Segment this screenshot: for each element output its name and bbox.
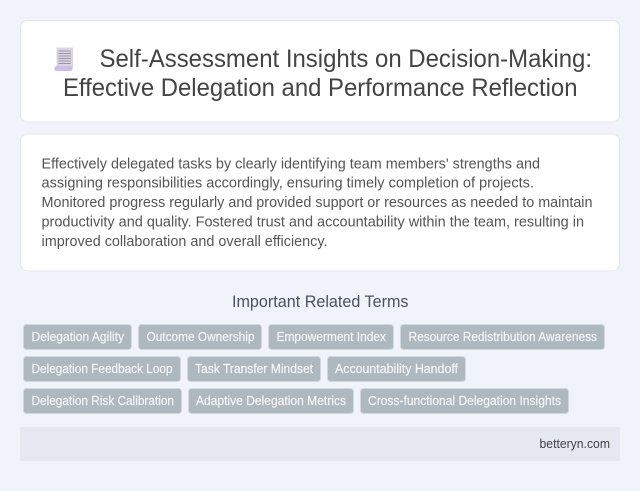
tag: Resource Redistribution Awareness — [400, 324, 604, 350]
footer source text: betteryn.com — [540, 436, 610, 451]
tag: Accountability Handoff — [328, 356, 466, 382]
tag: Task Transfer Mindset: Task Transfer Mindset — [195, 361, 313, 376]
tag: Accountability Handoff: Accountability Handoff — [335, 361, 458, 376]
tag: Delegation Feedback Loop: Delegation Feedback Loop — [32, 361, 172, 376]
panel: term tags — [24, 324, 604, 414]
summary line 5: improved collaboration and overall efficiency. — [42, 234, 328, 250]
heading: important related terms: Important Related Terms — [232, 293, 408, 311]
tag: Outcome Ownership: Outcome Ownership — [146, 329, 254, 344]
summary line 4: productivity and quality. Fostered trust and accountability within the team, resulting in — [42, 214, 584, 230]
summary line 2: assigning responsibilities accordingly, ensuring timely completion of projects. — [42, 176, 534, 192]
summary line 1: Effectively delegated tasks by clearly identifying team members' strengths and — [42, 156, 540, 172]
tag: Delegation Agility — [24, 324, 132, 350]
tag: Adaptive Delegation Metrics — [188, 388, 354, 414]
tag: Resource Redistribution Awareness: Resource Redistribution Awareness — [408, 329, 597, 344]
tag: Empowerment Index — [268, 324, 394, 350]
tag: Cross-functional Delegation Insights: Cross-functional Delegation Insights — [368, 393, 561, 408]
panel: summary text card — [20, 134, 620, 271]
tag: Outcome Ownership — [138, 324, 262, 350]
tag: Empowerment Index: Empowerment Index — [276, 329, 386, 344]
tag: Delegation Risk Calibration — [24, 388, 182, 414]
tag: Delegation Feedback Loop — [24, 356, 180, 382]
title line 1: Self-Assessment Insights on Decision-Making: — [100, 45, 592, 73]
footer bar — [20, 427, 620, 461]
tag: Delegation Risk Calibration: Delegation Risk Calibration — [32, 393, 174, 408]
tag: Adaptive Delegation Metrics: Adaptive Delegation Metrics — [196, 393, 346, 408]
panel: title card — [20, 20, 620, 122]
title line 2: Effective Delegation and Performance Reflection — [63, 74, 578, 102]
tag: Delegation Agility: Delegation Agility — [32, 329, 124, 344]
icon: document scroll — [54, 48, 73, 71]
summary line 3: Monitored progress regularly and provided support or resources as needed to maintain — [42, 195, 592, 211]
tag: Cross-functional Delegation Insights — [360, 388, 568, 414]
tag: Task Transfer Mindset — [188, 356, 320, 382]
